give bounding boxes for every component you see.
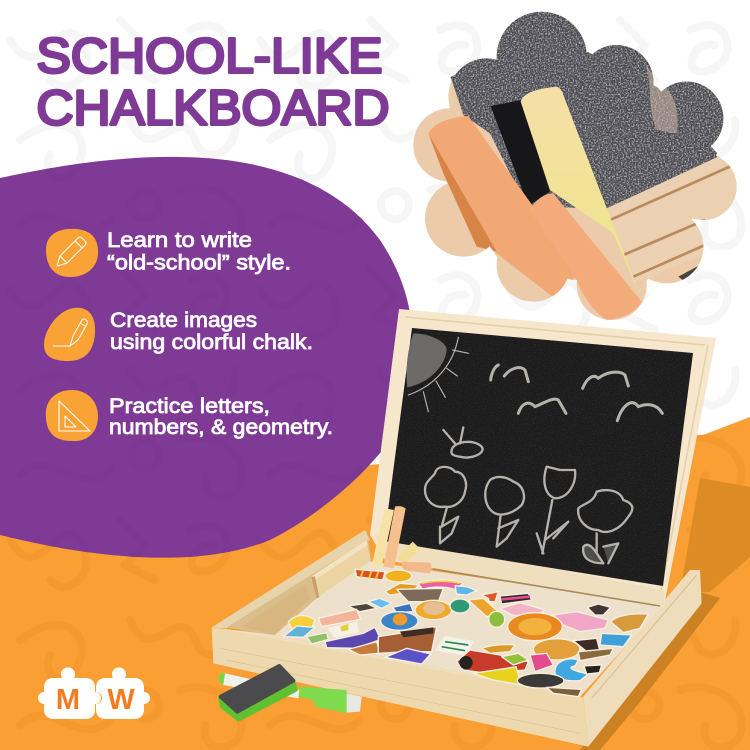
logo: puzzle pieces MW <box>38 667 150 719</box>
title <box>36 30 390 136</box>
text: practice letters <box>109 395 333 439</box>
magnets <box>283 569 648 697</box>
text: learn to write <box>107 229 291 274</box>
chalkboard frame <box>370 309 716 606</box>
rabbit <box>443 427 483 458</box>
text: learn to write: “old-school” style. <box>107 252 291 274</box>
orange chalk long <box>428 116 575 300</box>
feature: practice letters <box>46 390 333 441</box>
text: practice letters: Practice letters, <box>109 395 270 418</box>
icon: chalk drawing a line <box>44 308 95 361</box>
flowers <box>425 467 632 563</box>
chalk pieces beside the board <box>372 506 432 573</box>
feature: create images <box>44 308 313 361</box>
chalkboard bottom rail shadow on floor <box>433 569 660 606</box>
logo letters <box>56 684 135 716</box>
logo right piece <box>96 667 150 719</box>
chalk dust smear <box>645 63 678 133</box>
box inner wall <box>227 539 372 636</box>
wood ledge <box>607 155 743 283</box>
box floor <box>275 560 663 697</box>
text: create images <box>110 309 313 354</box>
box front rim <box>212 627 583 698</box>
birds <box>491 365 662 421</box>
feature: learn to write <box>46 229 291 277</box>
chalk drawings <box>407 333 662 563</box>
box front face <box>212 627 588 747</box>
eraser <box>220 666 296 720</box>
photo: chalk close-up in flower shape <box>413 12 737 320</box>
box left rim <box>212 530 370 628</box>
chalkboard surface <box>380 325 700 590</box>
text: create images: using colorful chalk. <box>110 331 313 354</box>
sun <box>407 333 468 412</box>
text: practice letters: numbers, & geometry. <box>109 416 333 439</box>
icon: set square <box>46 390 98 441</box>
chalkboard bottom rail <box>375 535 664 606</box>
eraser and marker <box>218 666 362 720</box>
orange chalk short <box>529 193 642 320</box>
text: create images: Create images <box>110 309 257 332</box>
title: SCHOOL-LIKE <box>36 30 383 84</box>
chalkboard surface <box>450 12 724 208</box>
board cast shadow <box>680 478 750 592</box>
orange background shape <box>0 417 750 750</box>
logo letters: W <box>107 684 135 716</box>
icon: pencil <box>46 229 98 277</box>
yellow chalk <box>521 87 640 295</box>
stored wood strips <box>242 540 371 635</box>
title: CHALKBOARD <box>36 82 390 136</box>
black sponge block <box>491 100 550 206</box>
wooden box and chalkboard <box>212 309 716 747</box>
logo letters: M <box>56 684 80 716</box>
logo left piece <box>38 667 101 719</box>
box right rail <box>583 570 702 747</box>
marker <box>218 673 362 713</box>
purple panel <box>0 157 412 558</box>
box cast shadow <box>580 592 720 750</box>
chalkboard frame bevel lines <box>405 317 708 596</box>
text: learn to write: Learn to write <box>107 229 252 252</box>
